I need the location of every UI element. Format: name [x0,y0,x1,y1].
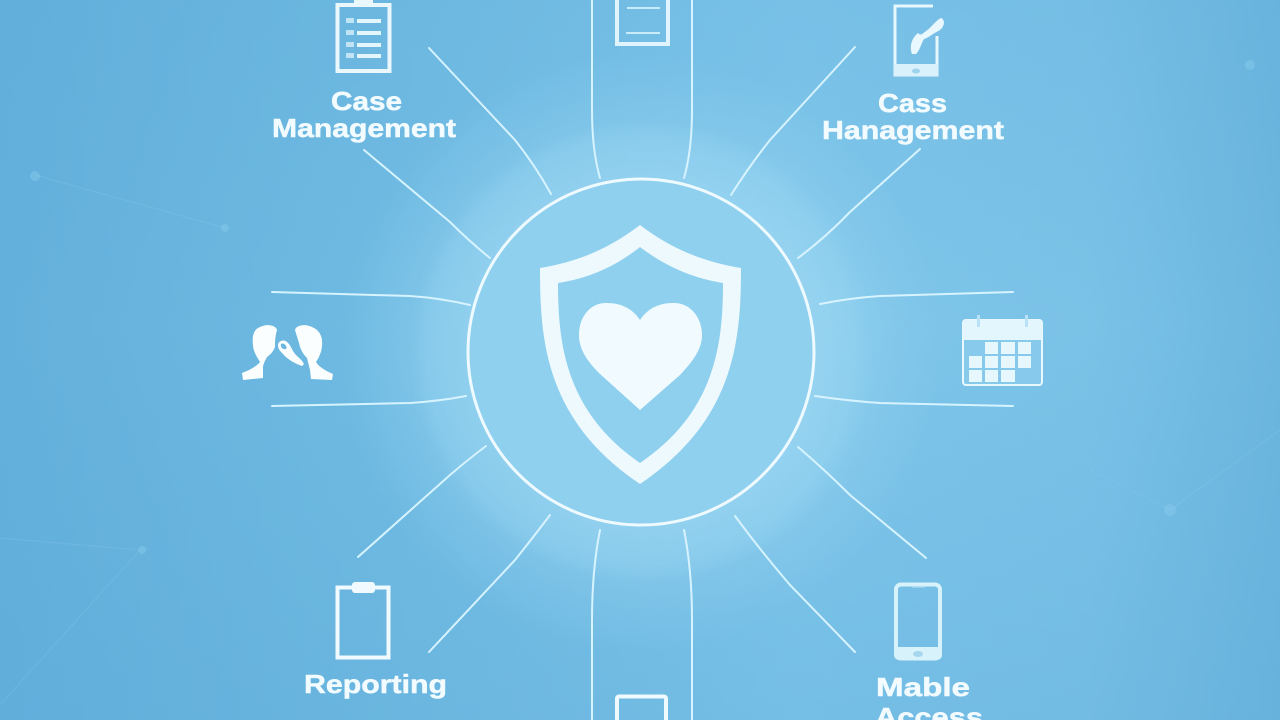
shield with heart icon [540,225,741,484]
label: Mable Access: Mable [876,672,970,702]
icon: document bottom centre [617,696,666,720]
icon: calendar [963,315,1042,385]
icon: clipboard checklist [338,0,390,71]
icon: document top centre [617,0,668,44]
icon: smartphone [894,584,942,660]
label: Reporting: Reporting [304,669,447,699]
label: Cass Hanagement right: Hanagement [822,115,1004,145]
connector lines [272,0,1013,720]
label: Mable Access [875,672,983,720]
label: Cass Hanagement right: Cass [878,88,947,118]
label: Case Management left [272,86,456,143]
central disc with ring [409,120,873,584]
icon: empty clipboard [338,582,388,658]
label: Case Management left: Case [331,86,402,116]
icon: tablet with handset [894,6,944,76]
label: Case Management left: Management [272,113,456,143]
label: Cass Hanagement right [822,88,1004,145]
icon: two heads with handset [242,325,333,380]
